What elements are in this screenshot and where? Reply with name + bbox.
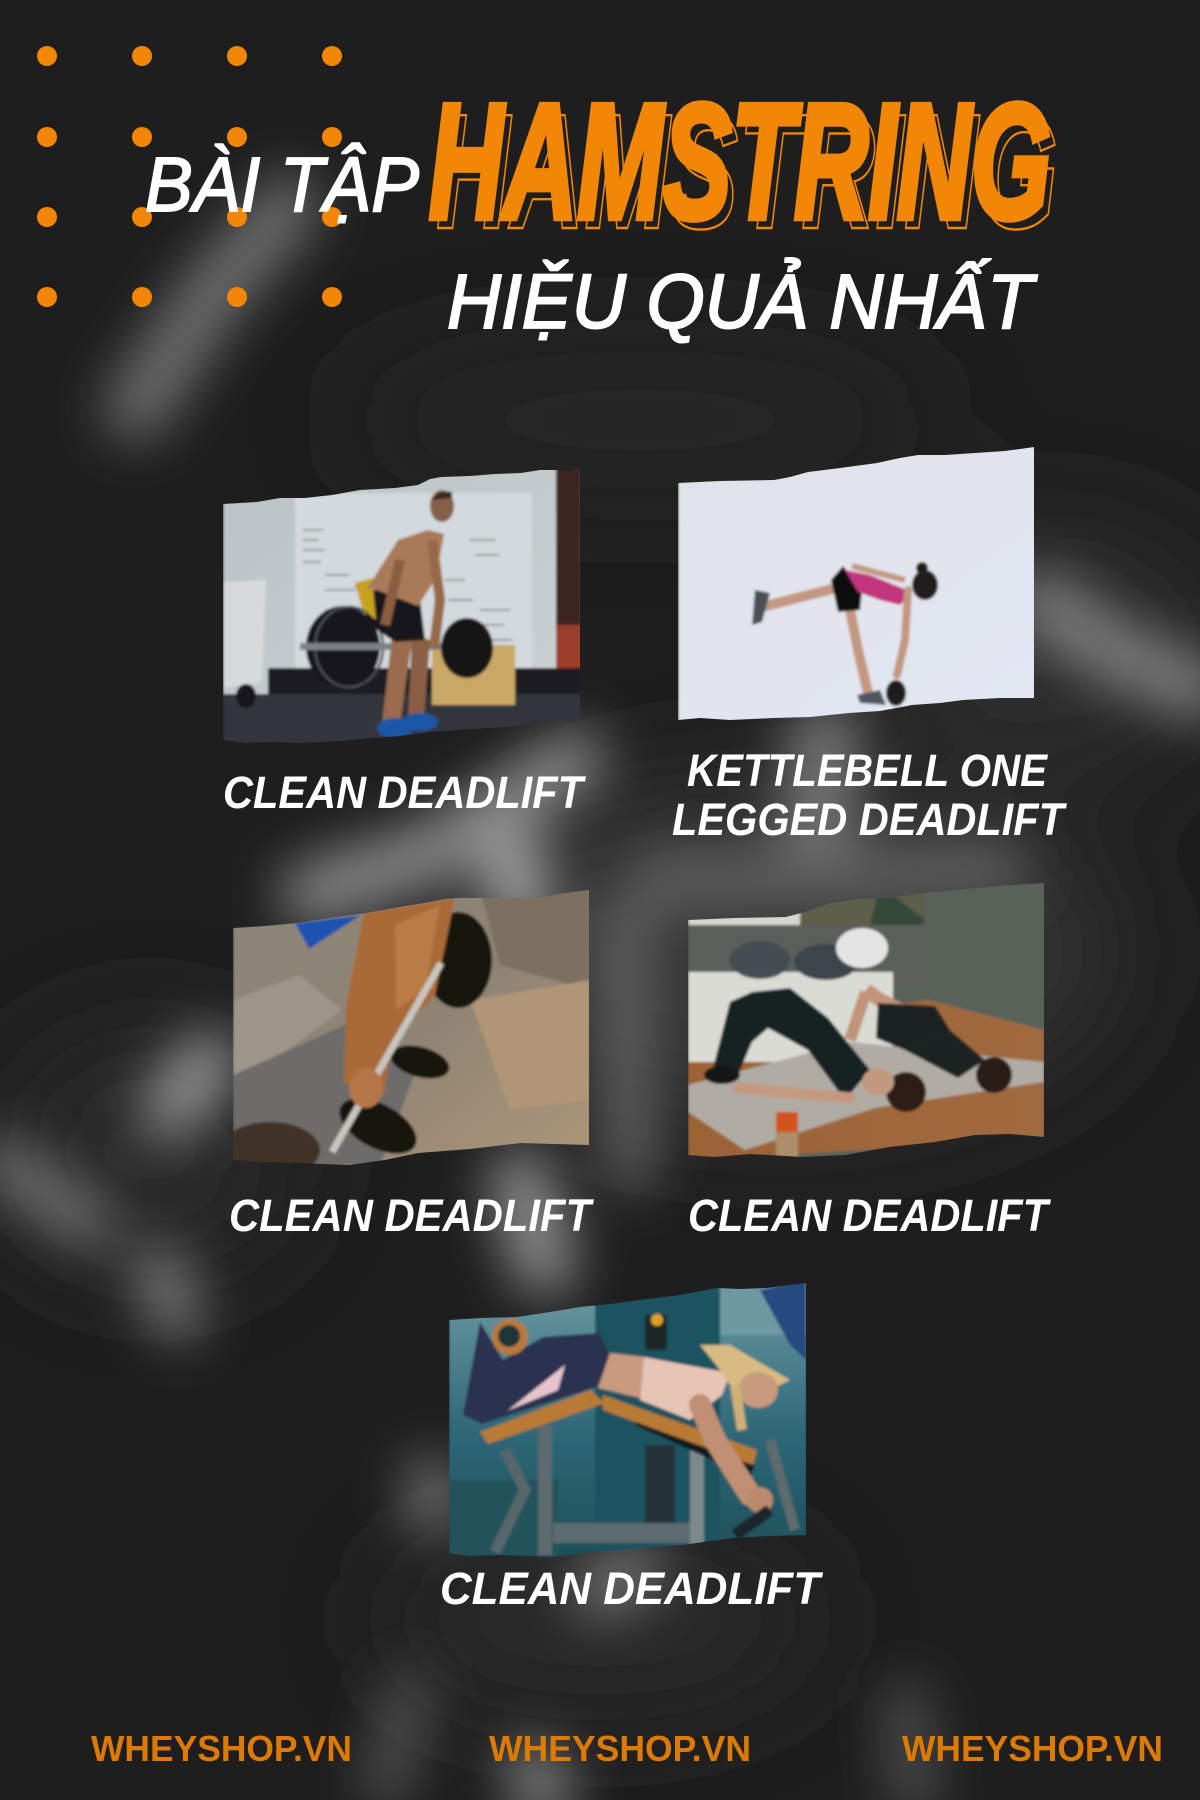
footer branding bbox=[91, 1728, 1163, 1769]
footer branding: WHEYSHOP.VN bbox=[902, 1728, 1163, 1769]
label: clean deadlift: CLEAN DEADLIFT bbox=[688, 1190, 1051, 1241]
panel: exercise 2 bbox=[672, 445, 1067, 845]
panel: exercise 3 bbox=[220, 888, 594, 1241]
label: clean deadlift: CLEAN DEADLIFT bbox=[223, 767, 586, 818]
labels: kettlebell one legged deadlift: KETTLEBELL ONE bbox=[687, 745, 1049, 796]
label: clean deadlift: CLEAN DEADLIFT bbox=[440, 1563, 823, 1614]
photo: women doing glute bridges bbox=[688, 880, 1046, 1160]
panel: exercise 1 bbox=[223, 460, 586, 818]
photo: close-up barbell grip bbox=[220, 888, 591, 1178]
footer branding: WHEYSHOP.VN bbox=[91, 1728, 352, 1769]
panel: exercise 5 bbox=[440, 1280, 823, 1614]
footer branding: WHEYSHOP.VN bbox=[489, 1728, 751, 1769]
label: clean deadlift: CLEAN DEADLIFT bbox=[229, 1190, 594, 1241]
title bbox=[145, 70, 1058, 345]
title line: HIỆU QUẢ NHẤT: HIỆU QUẢ NHẤT bbox=[447, 256, 1038, 345]
labels: kettlebell one legged deadlift: LEGGED DEADLIFT bbox=[672, 794, 1067, 845]
title line: BÀI TẬP: BÀI TẬP bbox=[145, 142, 419, 228]
labels: kettlebell one legged deadlift bbox=[672, 745, 1067, 845]
panel: exercise 4 bbox=[688, 880, 1051, 1241]
decorative dot grid bbox=[37, 46, 342, 307]
photo: woman on hamstring curl machine bbox=[449, 1280, 810, 1560]
photo: kettlebell one legged deadlift bbox=[678, 445, 1036, 725]
photo: man barbell deadlift bbox=[223, 460, 583, 754]
